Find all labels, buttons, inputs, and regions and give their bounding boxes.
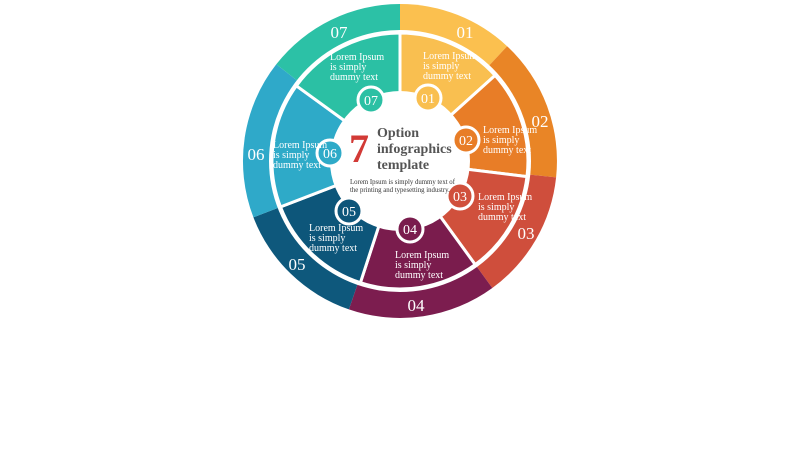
inner segments <box>272 33 528 289</box>
badge numbers: 07 <box>364 94 378 109</box>
segment texts: dummy text <box>395 270 443 281</box>
center title: template <box>377 158 429 173</box>
badge numbers: 01 <box>421 92 435 107</box>
badge numbers: 02 <box>459 134 473 149</box>
outer labels <box>248 23 548 315</box>
outer labels: 03 <box>518 224 534 243</box>
segment texts: dummy text <box>330 72 378 83</box>
segment texts: Lorem Ipsum <box>330 52 384 63</box>
center description: Lorem Ipsum is simply dummy text of <box>350 179 455 186</box>
badge numbers: 05 <box>342 205 356 220</box>
center description: the printing and typesetting industry. <box>350 187 450 194</box>
segment texts: is simply <box>423 61 459 72</box>
segment texts: dummy text <box>309 243 357 254</box>
segment texts: is simply <box>483 135 519 146</box>
center title: infographics <box>377 142 452 157</box>
segment texts: dummy text <box>423 71 471 82</box>
segment texts: Lorem Ipsum <box>423 51 477 62</box>
badge numbers: 06 <box>323 147 337 162</box>
segment texts: Lorem Ipsum <box>309 223 363 234</box>
center title <box>349 126 452 173</box>
number badges <box>317 85 479 242</box>
outer labels: 04 <box>408 296 425 315</box>
center title: 7 <box>349 126 369 171</box>
outer labels: 01 <box>456 23 474 42</box>
segment texts: Lorem Ipsum <box>273 140 327 151</box>
segment texts: Lorem Ipsum <box>395 250 449 261</box>
badge numbers: 04 <box>403 223 417 238</box>
segment texts: is simply <box>395 260 431 271</box>
segment texts: is simply <box>478 202 514 213</box>
segment texts: dummy text <box>483 145 531 156</box>
badge numbers <box>323 92 473 238</box>
segment texts: is simply <box>273 150 309 161</box>
segment texts: Lorem Ipsum <box>478 192 532 203</box>
outer labels: 06 <box>248 145 264 164</box>
segment texts: Lorem Ipsum <box>483 125 537 136</box>
segment texts <box>273 51 537 281</box>
badge numbers: 03 <box>453 190 467 205</box>
segment texts: dummy text <box>478 212 526 223</box>
segment texts: is simply <box>330 62 366 73</box>
outer labels: 02 <box>532 112 548 131</box>
segment texts: dummy text <box>273 160 321 171</box>
segment texts: is simply <box>309 233 345 244</box>
center white disk <box>330 91 470 231</box>
outer labels: 05 <box>288 255 306 274</box>
outer labels: 07 <box>330 23 348 42</box>
outer ring <box>243 4 557 318</box>
center title: Option <box>377 126 419 141</box>
